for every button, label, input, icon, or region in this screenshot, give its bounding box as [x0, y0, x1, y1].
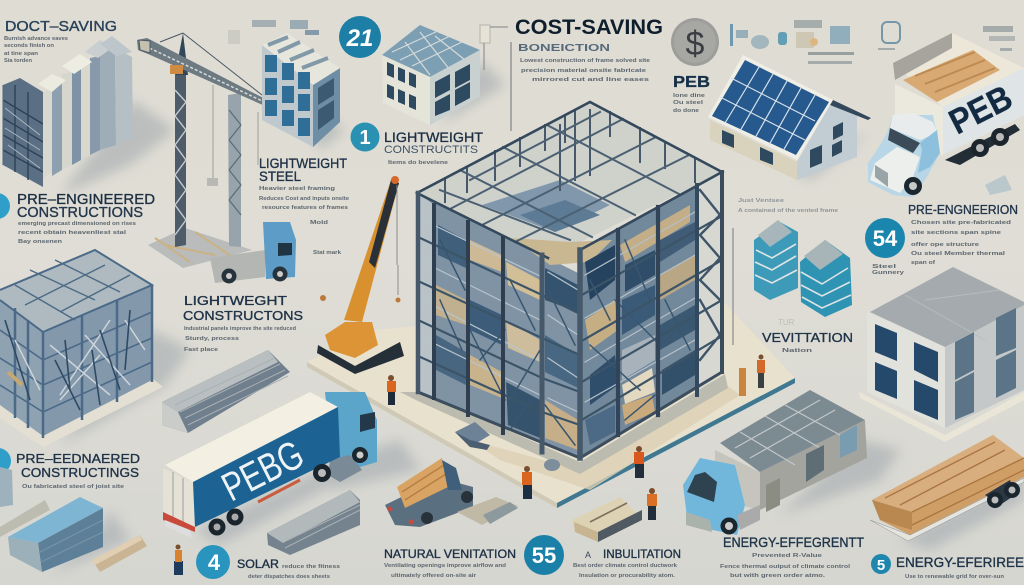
text block: doct-saving body: seconds finish on — [4, 43, 54, 49]
text block: faded vevittation upper text: Just Ventsee — [738, 198, 784, 204]
icon: left teal circle one — [0, 193, 10, 219]
steel beams and columns — [417, 102, 722, 458]
heading: pre-engineered constructions: PRE–ENGINEERED — [17, 191, 155, 208]
text block: lightweight steel body — [259, 186, 349, 256]
heading: insulation: A — [585, 550, 591, 560]
text block: lightweght body — [184, 326, 296, 353]
worker: lower right — [647, 488, 657, 520]
heading: insulation: INBULITATION — [603, 547, 681, 561]
panel: blue insulated panels — [0, 467, 103, 572]
heading: lightweight steel — [259, 155, 347, 184]
panel: blue truck cab top — [210, 222, 296, 284]
main steel frame building — [400, 102, 728, 474]
text block: energy body: Prevented R-Value — [752, 553, 822, 559]
text block: faded vevittation upper text: A contained of the vented frame — [738, 208, 838, 214]
heading: pre-eednaered constructings — [16, 451, 140, 490]
icon: left teal circle two — [0, 448, 11, 474]
worker: bottom left — [174, 544, 183, 575]
icon: dollar coin — [671, 18, 719, 66]
panel: flatbed with timber — [385, 458, 518, 527]
badge: 4: 4 — [208, 550, 221, 575]
icon: blue block stack left — [754, 220, 798, 300]
text block: lightweight steel body: Stat mark — [313, 250, 341, 256]
badge: 55 — [524, 535, 564, 575]
text block: lightweight steel body: Heavier steel framing — [259, 186, 335, 192]
heading: solar — [237, 557, 340, 580]
icons: faded mini icons top left — [228, 20, 319, 44]
vertical label line — [732, 228, 734, 345]
divider line: cost-saving — [510, 42, 512, 131]
text block: pre-engineered body — [18, 221, 136, 245]
text block: energy body: but with green order atmo. — [730, 573, 826, 579]
text block: energy body: Fence thermal output of climate control — [720, 564, 851, 570]
text block: pre-engineerion body: span of — [911, 260, 935, 266]
heading: pre-eednaered constructings: PRE–EEDNAERED — [16, 451, 140, 466]
heading: energy-eferiree: Use to renewable grid for over-sun — [905, 574, 1004, 580]
panel: PEB delivery truck — [868, 33, 1024, 197]
heading: energy-eferiree — [896, 554, 1024, 580]
text block: cost-saving body: precision material onsite fabricate — [521, 68, 646, 74]
badge: 21: 21 — [346, 25, 373, 52]
panel: modular blocks building — [262, 33, 340, 147]
heading: lightweight constructits — [384, 129, 483, 166]
text block: peb body: Ou steel — [673, 100, 704, 106]
text block: pre-engineerion body — [872, 220, 1011, 276]
text block: pre-engineered body: emerging precast dimensioned on rises — [18, 221, 136, 227]
text block: energy body — [720, 553, 851, 579]
badge: 54 — [865, 218, 905, 258]
panel: timber planks left — [92, 535, 147, 572]
badge: 54: 54 — [873, 226, 898, 251]
text block: natural venitation body — [384, 563, 506, 579]
heading: cost-saving: COST-SAVING — [515, 16, 663, 39]
plaza slab — [307, 300, 795, 508]
text block: lightweight steel body: Reduces Cost and inputs onsite — [259, 196, 349, 202]
subheading: boneiction: BONEICTION — [518, 42, 610, 54]
heading: vevittation: VEVITTATION — [762, 330, 853, 345]
heading: solar: reduce the fitness — [282, 564, 340, 570]
text block: lightweight steel body: Mold — [310, 220, 328, 226]
heading: lightweght constructons: LIGHTWEGHT — [184, 293, 287, 308]
heading: lightweight constructits: CONSTRUCTITS — [384, 144, 478, 156]
panel: PEBG blue trailer and cab: PEBG — [215, 432, 311, 510]
heading: lightweght constructons: CONSTRUCTONS — [183, 308, 303, 323]
text block: doct-saving body: at tine span — [4, 51, 38, 57]
panel: PEB delivery truck: PEB — [943, 78, 1019, 142]
panel: timber pile — [572, 497, 642, 542]
heading: lightweght constructons — [183, 293, 303, 323]
text block: doct-saving body: Burnish advance eaves — [4, 36, 68, 42]
heading: solar: deter dispatches does sheets — [248, 574, 330, 580]
text block: pre-engineerion body: Steel — [872, 264, 897, 270]
text block: lightweght body: Fast place — [184, 347, 218, 353]
panel: left steel frame building — [0, 250, 163, 447]
text block: pre-engineerion body: site sections span spine — [911, 230, 1001, 236]
badge: 55: 55 — [532, 543, 556, 568]
text block: pre-engineered body: recent obtain heavenliest stal — [18, 230, 127, 236]
heading: pre-eednaered constructings: Ou fabricated steel of joist site — [22, 484, 124, 490]
heading: peb: PEB — [673, 74, 710, 91]
worker: near crane — [387, 375, 396, 405]
panel: timber trailer — [870, 435, 1024, 541]
text block: cost-saving body: mirrored cut and line eases — [532, 77, 649, 83]
heading: natural venitation: NATURAL VENITATION — [384, 547, 516, 561]
heading: vevittation: TUR — [778, 318, 795, 327]
text block: peb body: do done — [673, 108, 699, 114]
icon: dollar coin: $ — [686, 25, 705, 63]
text block: pre-engineerion body: offer ope structure — [911, 242, 979, 248]
text block: doct-saving body: Sia torden — [4, 58, 32, 64]
text block: insulation body: Insulation or procurability atom. — [579, 573, 676, 579]
panel: grey building with cab — [683, 390, 867, 535]
icon: faded small machine — [985, 175, 1012, 195]
heading: pre-engineered constructions — [17, 191, 155, 221]
heading: vevittation: Nation — [782, 348, 812, 354]
icons: faded mini icons top right — [730, 20, 1015, 64]
panel: steel bundle upper — [162, 350, 290, 433]
worker: right of centre — [634, 446, 644, 478]
heading: vevittation — [762, 318, 853, 354]
text block: pre-engineered body: Bay onsenen — [18, 239, 62, 245]
heading: lightweight constructits: Items do bevelene — [388, 160, 448, 166]
badge: 1: 1 — [359, 127, 371, 149]
text block: cost-saving body: Lowest construction of frame solved site — [520, 58, 650, 64]
text block: peb body: lone dine — [673, 93, 705, 99]
heading: doct-saving: DOCT–SAVING — [5, 18, 117, 35]
text block: lightweght body: Industrial panels improve the site reduced — [184, 326, 296, 332]
text block: doct-saving body — [4, 36, 68, 64]
text block: faded vevittation upper text — [738, 198, 838, 214]
heading: pre-eednaered constructings: CONSTRUCTINGS — [21, 465, 139, 480]
text block: natural venitation body: ultimately offered on-site air — [391, 573, 476, 579]
badge: 4 — [196, 545, 230, 579]
heading: pre-engineered constructions: CONSTRUCTIONS — [17, 205, 143, 221]
badge: 1 — [350, 122, 380, 152]
panel: tower crane — [137, 33, 275, 268]
panel: small glazed building — [382, 25, 508, 125]
interior materials — [436, 180, 695, 450]
text block: pre-engineerion body: Chosen site pre-fabricated — [911, 220, 1011, 226]
badge: 5: 5 — [877, 557, 885, 574]
text block: lightweght body: Sturdy, process — [185, 336, 239, 342]
text block: pre-engineerion body: Gunnery — [872, 270, 904, 276]
text block: pre-engineerion body: Ou steel Member thermal — [911, 251, 1006, 257]
text block: insulation body — [573, 563, 677, 579]
heading: lightweight steel: LIGHTWEIGHT — [259, 155, 347, 171]
text block: insulation body: Best order climate control ductwork — [573, 563, 677, 569]
text block: natural venitation body: Ventilating openings improve airflow and — [384, 563, 506, 569]
panel: mobile crane — [317, 176, 404, 374]
small stack beside building — [455, 422, 560, 471]
panel: right grey building — [859, 267, 1024, 442]
heading: lightweight steel: STEEL — [259, 168, 301, 184]
panel: solar house — [708, 55, 871, 180]
heading: pre-engineerion: PRE-ENGNEERION — [908, 202, 1018, 217]
text block: lightweight steel body: resource features of frames — [262, 205, 348, 211]
text block: cost-saving body — [520, 58, 650, 83]
icon: blue block stack right — [800, 240, 852, 317]
panel: PEBG blue trailer and cab — [163, 392, 377, 538]
badge: 21 — [339, 16, 381, 58]
panel: top-left stacked panels building — [3, 36, 133, 187]
badge: 5 — [871, 554, 891, 574]
worker: centre — [522, 466, 532, 499]
heading: lightweight constructits: LIGHTWEIGHT — [384, 129, 483, 145]
panel: steel bundle lower — [267, 490, 360, 555]
heading: solar: SOLAR — [237, 557, 279, 571]
workers: by building corner — [739, 354, 765, 396]
heading: energy-effegrentt: ENERGY-EFFEGRENTT — [723, 534, 864, 550]
face fills — [400, 102, 728, 474]
text block: peb body — [673, 93, 705, 114]
